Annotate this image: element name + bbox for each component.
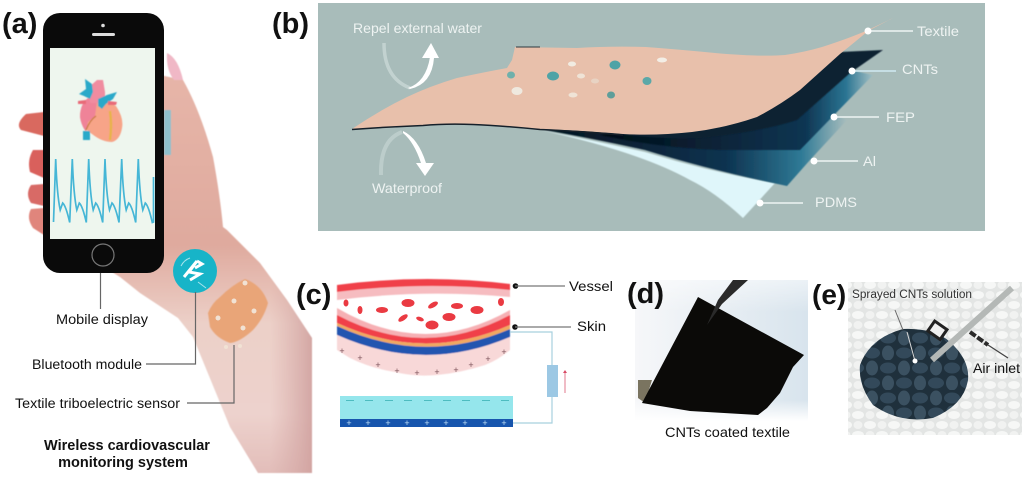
triboelectric layers: + (482, 418, 488, 428)
callout: mobile display (56, 273, 148, 327)
label: Al: Al (863, 153, 876, 169)
label (d): (d) (627, 278, 664, 310)
spray pointer (895, 310, 918, 364)
callout: repel external water (353, 20, 482, 89)
label (c): (c) (296, 279, 331, 311)
label: Vessel (513, 278, 613, 294)
textile dark edge (352, 124, 623, 135)
system caption: Wireless cardiovascular (44, 438, 210, 454)
label (e): (e) (812, 279, 846, 310)
textile sensor patch (208, 279, 268, 349)
callout: bluetooth module: Bluetooth module (32, 357, 142, 372)
triboelectric layers: + (443, 418, 449, 428)
callout: textile triboelectric sensor (15, 345, 234, 411)
label (a): (a) (2, 8, 37, 40)
charges on skin: + (414, 368, 420, 378)
panel: layered textile structure (b) (318, 3, 985, 231)
label (b): (b) (272, 8, 309, 40)
triboelectric layers (340, 396, 513, 428)
label: sprayed CNTs solution: Sprayed CNTs solution (852, 289, 972, 301)
label: air inlet: Air inlet (973, 360, 1020, 376)
water droplets (507, 58, 667, 98)
layer: Al (545, 100, 847, 186)
charges on skin: + (339, 346, 345, 356)
label: Textile: Textile (917, 23, 959, 39)
panel: wireless monitoring system (a) (15, 13, 312, 473)
label: Skin: Skin (577, 318, 606, 334)
charges on skin: + (468, 360, 474, 370)
panel: sensing mechanism (c) (337, 278, 613, 428)
charges on skin: + (453, 365, 459, 375)
phone screen (50, 48, 155, 239)
charges on skin: + (485, 354, 491, 364)
panel: spray coating (e) (848, 282, 1022, 435)
label: CNTs (848, 61, 938, 77)
callout: waterproof (372, 131, 442, 196)
charges on skin: + (357, 353, 363, 363)
icon: anatomical heart (78, 79, 122, 142)
red blood cells (344, 298, 504, 330)
chart: pulse waveform (54, 159, 154, 222)
callout: bluetooth module (32, 292, 196, 372)
label: PDMS: PDMS (815, 194, 857, 210)
smartphone (43, 13, 164, 273)
caption: CNTs coated textile (665, 424, 790, 440)
label: Vessel: Vessel (569, 278, 613, 294)
airbrush (928, 288, 1012, 360)
label: PDMS (756, 194, 857, 210)
triboelectric layers: + (462, 418, 468, 428)
charges on skin: + (375, 360, 381, 370)
charges on skin: + (394, 366, 400, 376)
label: Al (810, 153, 876, 169)
layer: FEP (600, 70, 873, 150)
layer: CNTs (600, 50, 883, 138)
external circuit (510, 332, 567, 423)
callout: mobile display: Mobile display (56, 312, 148, 327)
triboelectric layers: + (404, 418, 410, 428)
coated knit area (860, 329, 968, 419)
triboelectric layers: + (424, 418, 430, 428)
icon: bluetooth module (173, 249, 217, 293)
label: FEP: FEP (886, 109, 915, 125)
charges on skin: + (501, 347, 507, 357)
system caption: monitoring system (58, 455, 188, 471)
triboelectric layers: + (365, 418, 371, 428)
home button (92, 244, 114, 266)
triboelectric layers: + (501, 418, 507, 428)
layer: PDMS (540, 130, 775, 218)
label: Textile (864, 23, 959, 39)
charges on skin: + (434, 367, 440, 377)
callout: textile triboelectric sensor: Textile triboelectric sensor (15, 396, 181, 411)
callout: waterproof: Waterproof (372, 180, 442, 196)
label: Skin (512, 318, 606, 334)
triboelectric layers: + (385, 418, 391, 428)
layer: textile (352, 18, 893, 135)
triboelectric layers: + (346, 418, 352, 428)
hand and forearm (19, 53, 312, 473)
panel: CNTs coated textile photo (d) (635, 280, 808, 440)
callout: repel external water: Repel external water (353, 20, 482, 36)
vessel and skin cross-section (337, 279, 510, 376)
label: CNTs: CNTs (902, 61, 938, 77)
label: FEP (830, 109, 915, 125)
